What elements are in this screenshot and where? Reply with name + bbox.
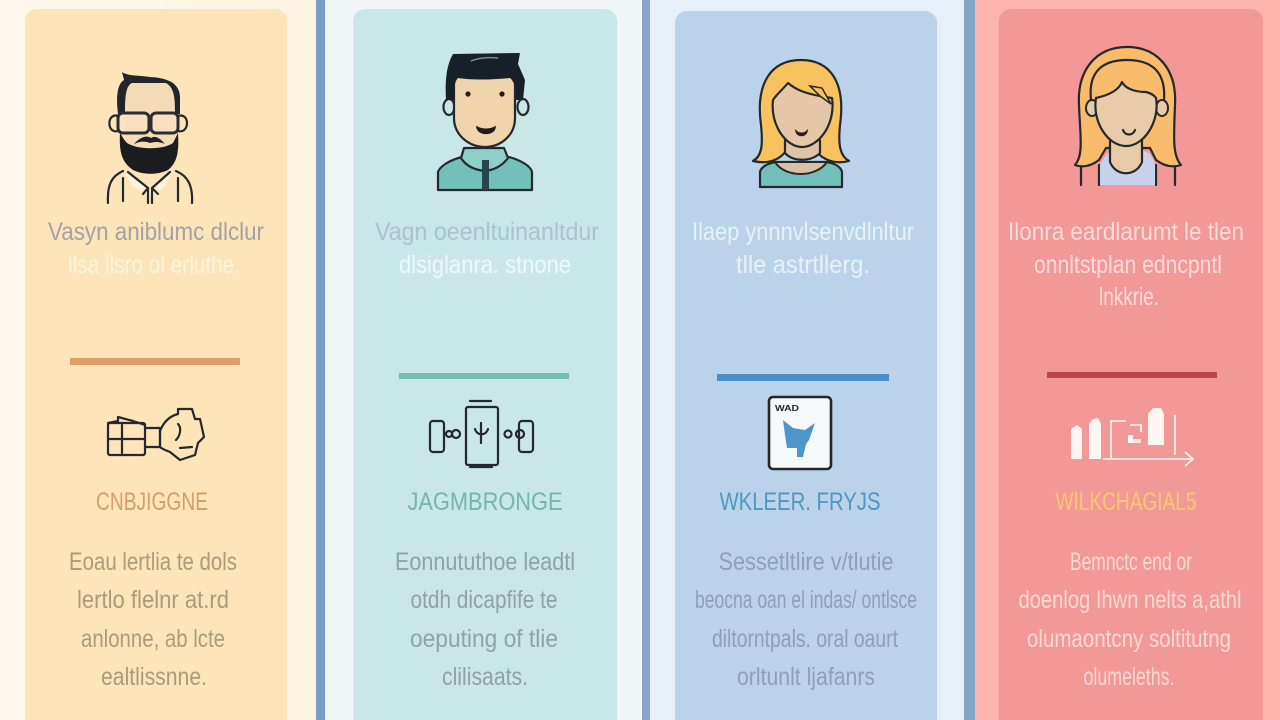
icon: document with blue mark: WAD (775, 403, 799, 413)
body text: diltorntpals. oral oaurt (712, 625, 898, 653)
card 4 (999, 9, 1263, 720)
body text (69, 548, 237, 691)
body text: lertlo flelnr at.rd (77, 586, 229, 614)
avatar: blonde woman in teal top (753, 60, 849, 187)
intro text: Ilonra eardlarumt le tlen (1008, 218, 1244, 246)
body text: olumeleths. (1084, 663, 1174, 691)
divider (70, 358, 240, 365)
body text: ealtlissnne. (101, 663, 207, 691)
card 3 (675, 11, 937, 720)
icon: camera-like device (108, 409, 204, 460)
body text: clilisaats. (442, 663, 528, 691)
body text: orltunlt ljafanrs (737, 663, 875, 691)
body text: Eoau lertlia te dols (69, 548, 237, 576)
intro text: onnltstplan edncpntl (1034, 251, 1222, 279)
avatar: man in teal jacket (438, 53, 532, 190)
intro text (1008, 218, 1244, 311)
avatar: bearded man with glasses (108, 72, 192, 203)
intro text: tlle astrtllerg. (736, 251, 870, 279)
card 1 (25, 9, 287, 720)
body text: Eonnututhoe leadtl (395, 548, 575, 576)
body text: oeputing of tlie (410, 625, 558, 653)
intro text (375, 218, 599, 279)
body text: Bemnctc end or (1070, 548, 1192, 576)
heading: third capability: WKLEER. FRYJS (720, 488, 880, 516)
intro text: dlsiglanra. stnone (399, 251, 571, 279)
body text (1018, 548, 1242, 691)
panel: persona 1 (25, 9, 287, 720)
divider (1047, 372, 1217, 378)
heading: first capability: CNBJIGGNE (96, 488, 208, 516)
icon: white bar chart with arrow (1071, 408, 1193, 466)
intro text (48, 218, 264, 279)
card 2 (353, 9, 617, 720)
body text: Sessetltlire v/tlutie (718, 548, 894, 576)
heading: fourth capability: WILKCHAGIAL5 (1056, 488, 1196, 516)
panel: persona 4 (999, 9, 1263, 720)
heading: second capability: JAGMBRONGE (408, 488, 562, 516)
divider (399, 373, 569, 379)
intro text: Vasyn aniblumc dlclur (48, 218, 264, 246)
avatar: woman with long orange hair (1075, 47, 1181, 185)
intro text: Ilaep ynnnvlsenvdlnltur (692, 218, 914, 246)
body text: beocna oan el indas/ ontlsce (695, 586, 917, 614)
intro text: ilsa ilsro ol erluthe. (68, 251, 240, 279)
intro text: lnkkrie. (1099, 283, 1159, 311)
body text (395, 548, 575, 691)
intro text: Vagn oeenltuinanltdur (375, 218, 599, 246)
divider (717, 374, 889, 381)
intro text (692, 218, 914, 279)
panel: persona 3 (675, 11, 937, 720)
body text: olumaontcny soltitutng (1027, 625, 1231, 653)
icon: document with blue mark (769, 397, 831, 469)
body text: anlonne, ab lcte (81, 625, 225, 653)
icon: phone with connected devices (430, 401, 533, 467)
body text (695, 548, 917, 691)
body text: otdh dicapfife te (410, 586, 558, 614)
panel: persona 2 (353, 9, 617, 720)
